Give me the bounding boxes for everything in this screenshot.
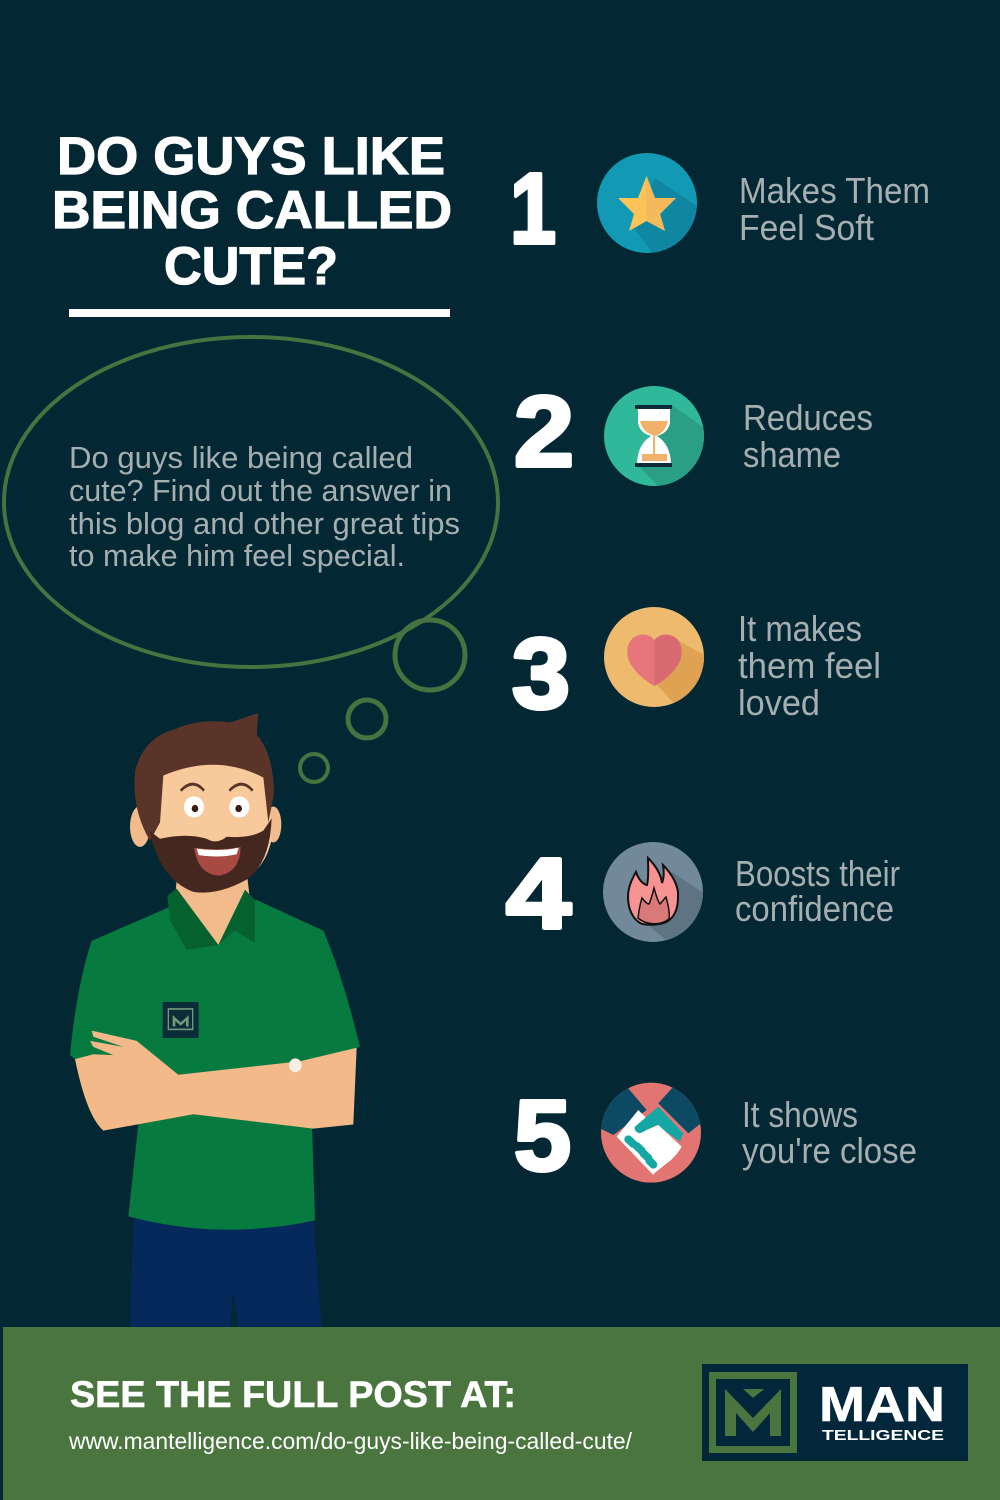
item 1 text: Feel Soft [739,207,874,248]
man character [70,713,360,1327]
item 4 text: confidence [735,888,894,929]
bubble text: to make him feel special. [69,538,405,573]
icon: star [597,153,700,256]
right arm [635,1107,683,1142]
logo: MAN [819,1378,945,1432]
neck [175,871,250,945]
bubble text: Do guys like being called [69,440,413,475]
thought bubble [4,337,498,782]
left cuff [601,1088,647,1135]
item 5 text: you're close [742,1130,917,1171]
item 5 text: It shows [742,1094,858,1135]
title: BEING CALLED [52,181,452,240]
title: CUTE? [164,237,338,296]
item 1 text [739,170,930,248]
number 1: 1 [510,153,556,265]
icon: heart [604,607,710,710]
item 3 text: loved [738,682,820,723]
number 5: 5 [514,1080,571,1192]
icon: handshake [597,1083,705,1183]
title: DO GUYS LIKE [57,127,445,186]
bubble text: this blog and other great tips [69,506,460,541]
wristwatch [289,1058,302,1072]
number 4: 4 [506,838,571,950]
bubble text: cute? Find out the answer in [69,473,452,508]
fingers [628,1139,653,1165]
number 2: 2 [514,376,574,488]
ear left [130,806,150,847]
footer heading: SEE THE FULL POST AT: [70,1374,516,1415]
title [52,127,452,296]
collar [167,889,255,950]
ear right [265,807,281,842]
logo: TELLIGENCE [822,1427,944,1444]
right cuff [658,1088,700,1134]
trousers [130,1218,322,1327]
item 3 text [738,608,881,723]
left hand [617,1110,657,1175]
number 3: 3 [512,618,570,730]
item 1 text: Makes Them [739,170,930,211]
title underline [69,309,450,317]
logo [702,1364,968,1461]
shirt badge [163,1002,199,1038]
beard [149,818,272,893]
item 2 text [743,397,873,475]
item 2 text: shame [743,434,841,475]
face [153,761,272,890]
item 3 text: It makes [738,608,862,649]
bubble text [69,440,460,573]
eyebrows [181,784,204,791]
footer url: www.mantelligence.com/do-guys-like-being-called-cute/ [68,1428,633,1454]
icon: flame [603,842,708,945]
right hand [633,1125,682,1174]
item 3 text: them feel [738,645,881,686]
footer band [3,1327,1000,1500]
item 4 text [735,853,900,929]
mouth [194,847,241,876]
item 4 text: Boosts their [735,853,900,894]
arms [75,1031,357,1131]
item 2 text: Reduces [743,397,873,438]
hair [134,713,274,841]
eyes [184,796,204,818]
icon: hourglass [604,386,710,490]
item 5 text [742,1094,917,1171]
shirt [70,900,360,1230]
